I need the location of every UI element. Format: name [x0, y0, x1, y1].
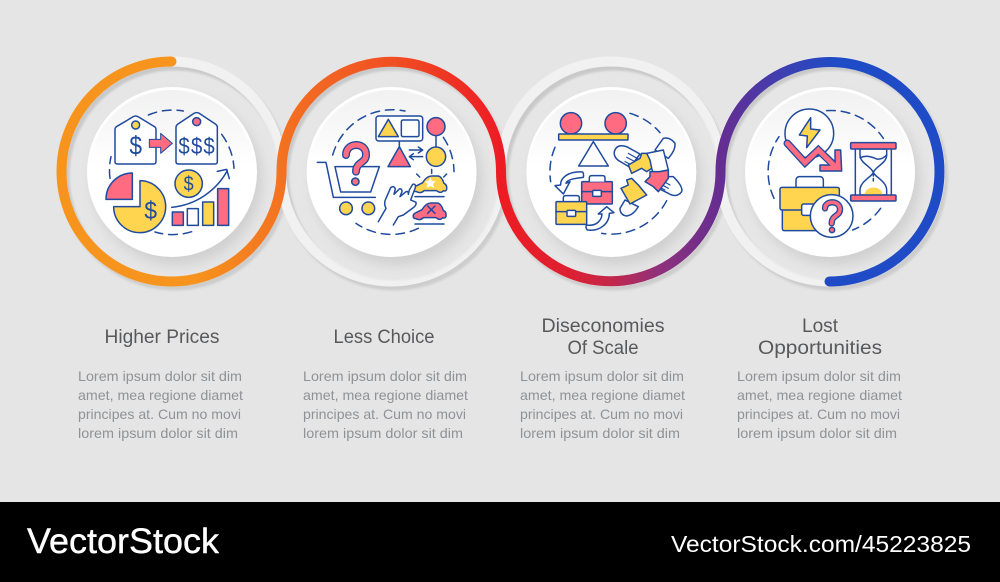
text block: less choice: lorem ipsum dolor sit dim: [303, 425, 463, 441]
footer logo text: VectorStock: [27, 522, 220, 561]
text block: diseconomies of scale: principes at. Cum no movi: [520, 406, 683, 422]
text block: lost opportunities: Lorem ipsum dolor sit dim: [737, 368, 901, 384]
text block: diseconomies of scale: Lorem ipsum dolor sit dim: [520, 368, 684, 384]
panel: less choice disc and icon: [307, 87, 482, 265]
icon: scale, briefcases and puzzle hands: [550, 113, 682, 234]
heading: less choice: Less Choice: [334, 327, 434, 348]
footer bar: [0, 502, 1000, 582]
heading: diseconomies of scale: Diseconomies: [542, 316, 664, 337]
panel: lost opportunities disc and icon: [745, 87, 920, 265]
icon: shopping cart, shapes and cars: [317, 110, 454, 234]
heading: lost opportunities: Opportunities: [758, 338, 882, 359]
text block: higher prices: lorem ipsum dolor sit dim: [78, 425, 238, 441]
icon: falling energy, hourglass and briefcase: [768, 109, 896, 237]
footer image id: VectorStock.com/45223825: [671, 531, 971, 557]
heading: diseconomies of scale: Of Scale: [568, 338, 638, 359]
icon: price tags, pie and growth chart: $: [129, 131, 142, 161]
text block: higher prices: amet, mea regione diamet: [78, 387, 243, 403]
icon: price tags, pie and growth chart: [106, 110, 234, 235]
icon: price tags, pie and growth chart: $: [191, 133, 202, 159]
ring shadows: [60, 60, 948, 290]
text block: lost opportunities: amet, mea regione diamet: [737, 387, 902, 403]
text block: higher prices: principes at. Cum no movi: [78, 406, 241, 422]
text block: less choice: principes at. Cum no movi: [303, 406, 466, 422]
icon: price tags, pie and growth chart: $: [203, 133, 215, 159]
flowing gradient ribbon: [62, 62, 940, 282]
inner ring wells: [66, 66, 938, 280]
text block: diseconomies of scale: amet, mea regione diamet: [520, 387, 685, 403]
light background rings: [56, 56, 945, 286]
text block: lost opportunities: principes at. Cum no movi: [737, 406, 900, 422]
panel: higher prices disc and icon: [87, 87, 262, 265]
text block: higher prices: Lorem ipsum dolor sit dim: [78, 368, 242, 384]
icon: price tags, pie and growth chart: $: [178, 133, 190, 159]
text block: diseconomies of scale: lorem ipsum dolor sit dim: [520, 425, 680, 441]
icon: price tags, pie and growth chart: $: [144, 197, 157, 225]
icon: price tags, pie and growth chart: $: [184, 173, 194, 196]
panel: diseconomies of scale disc and icon: [526, 87, 701, 265]
heading: lost opportunities: Lost: [802, 316, 839, 337]
heading: higher prices: Higher Prices: [104, 327, 220, 348]
text block: lost opportunities: lorem ipsum dolor sit dim: [737, 425, 897, 441]
text block: less choice: amet, mea regione diamet: [303, 387, 468, 403]
text block: less choice: Lorem ipsum dolor sit dim: [303, 368, 467, 384]
